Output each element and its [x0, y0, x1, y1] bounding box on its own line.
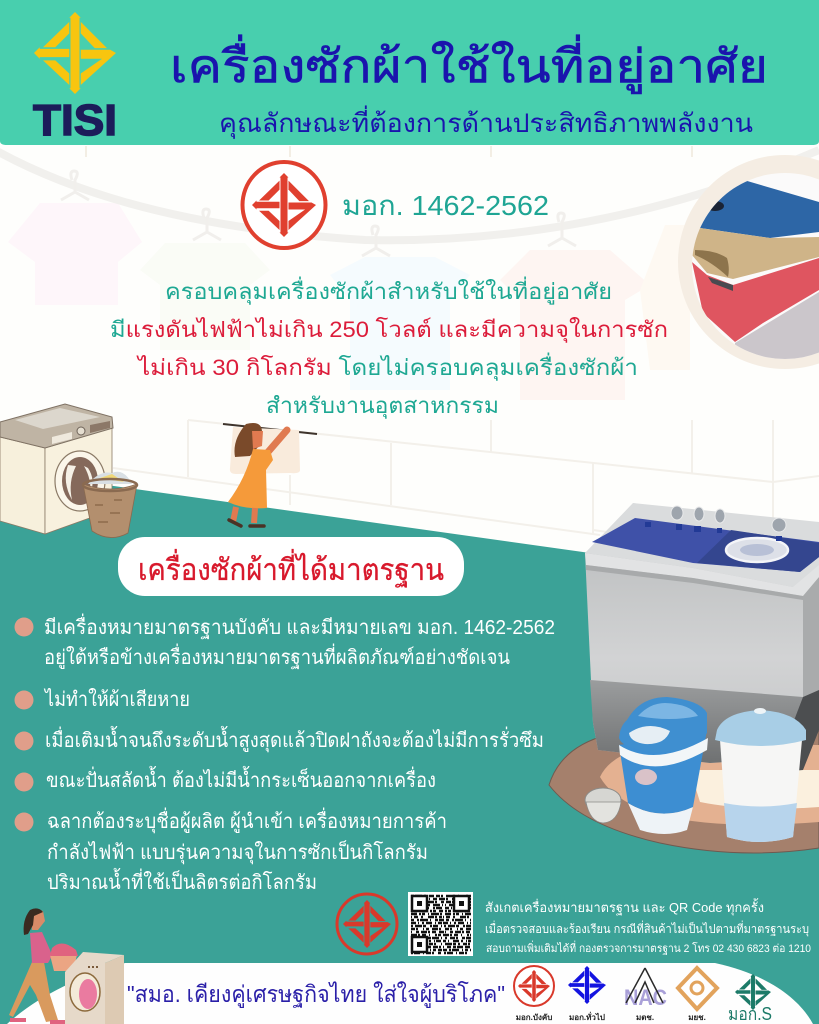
description paragraph: มีแรงดันไฟฟ้าไม่เกิน 250 โวลต์ และมีความจุในการซัก [110, 317, 668, 343]
bullet 5: ฉลากต้องระบุชื่อผู้ผลิต ผู้นำเข้า เครื่องหมายการค้า [47, 807, 447, 834]
NAC mark: NAC [624, 985, 667, 1010]
description paragraph: สำหรับงานอุตสาหกรรม [266, 393, 499, 419]
bullet 1 [14, 613, 555, 670]
notice text: สังเกตเครื่องหมายมาตรฐาน และ QR Code ทุกครั้ง [485, 898, 764, 916]
bullet 4: ขณะปั่นสลัดน้ำ ต้องไม่มีน้ำกระเซ็นออกจากเครื่อง [46, 766, 436, 792]
bullet 5 [14, 807, 447, 894]
NAC mark: มตช. [636, 1013, 654, 1022]
notice text [485, 898, 811, 955]
bullet list [14, 613, 555, 894]
community standard mark: มยช. [688, 1013, 706, 1022]
bullet 5: ปริมาณน้ำที่ใช้เป็นลิตรต่อกิโลกรัม [47, 868, 317, 894]
logo strip [514, 966, 772, 1024]
illustration: front-load washer and basket [0, 404, 137, 538]
heading pill [118, 537, 464, 596]
illustration: white spin bucket [715, 708, 806, 842]
general mark [568, 966, 606, 1022]
clothesline background [0, 146, 819, 400]
description paragraph: ไม่เกิน 30 กิโลกรัม โดยไม่ครอบคลุมเครื่องซักผ้า [136, 352, 638, 381]
description paragraph [110, 276, 668, 419]
mandatory mark [514, 966, 554, 1022]
illustration: small blue washer [619, 697, 708, 834]
TISI logo [33, 12, 117, 145]
bullet 5: กำลังไฟฟ้า แบบรุ่นความจุในการซักเป็นกิโลกรัม [47, 839, 428, 865]
bullet 1: อยู่ใต้หรือข้างเครื่องหมายมาตรฐานที่ผลิตภัณฑ์อย่างชัดเจน [44, 643, 510, 670]
bullet 2: ไม่ทำให้ผ้าเสียหาย [43, 688, 190, 711]
S mark [728, 974, 772, 1024]
mandatory mark: มอก.บังคับ [516, 1013, 552, 1022]
illustration: small basket [585, 788, 621, 823]
QR code [408, 892, 473, 956]
NAC mark [624, 968, 667, 1022]
bullet 3: เมื่อเติมน้ำจนถึงระดับน้ำสูงสุดแล้วปิดฝาถังจะต้องไม่มีการรั่วซึม [45, 726, 544, 753]
heading pill: เครื่องซักผ้าที่ได้มาตรฐาน [138, 549, 444, 588]
community standard mark [678, 968, 717, 1022]
illustration: small washing machine [65, 952, 124, 1024]
bottom white band [7, 963, 813, 1024]
illustration: girl hanging laundry [223, 423, 317, 526]
description paragraph: ครอบคลุมเครื่องซักผ้าสำหรับใช้ในที่อยู่อาศัย [165, 276, 612, 305]
mandatory standard logo [337, 894, 397, 954]
illustration: woman carrying laundry [9, 908, 78, 1022]
TISI logo: TISI [33, 96, 117, 145]
rug [549, 720, 819, 853]
header band [0, 0, 819, 145]
standard number badge [242, 162, 549, 248]
teal floor panel [0, 470, 819, 1024]
subtitle: คุณลักษณะที่ต้องการด้านประสิทธิภาพพลังงาน [219, 105, 753, 139]
wall tiles [113, 420, 819, 555]
illustration: twin tub washer [585, 503, 819, 772]
title: เครื่องซักผ้าใช้ในที่อยู่อาศัย [170, 34, 768, 94]
tagline: "สมอ. เคียงคู่เศรษฐกิจไทย ใส่ใจผู้บริโภค" [127, 981, 505, 1008]
S mark: มอก.S [728, 1004, 772, 1024]
bullet 1: มีเครื่องหมายมาตรฐานบังคับ และมีหมายเลข มอก. 1462-2562 [44, 613, 555, 639]
photo: folded clothes [678, 155, 819, 369]
standard number badge: มอก. 1462-2562 [342, 190, 549, 221]
general mark: มอก.ทั่วไป [569, 1011, 605, 1022]
